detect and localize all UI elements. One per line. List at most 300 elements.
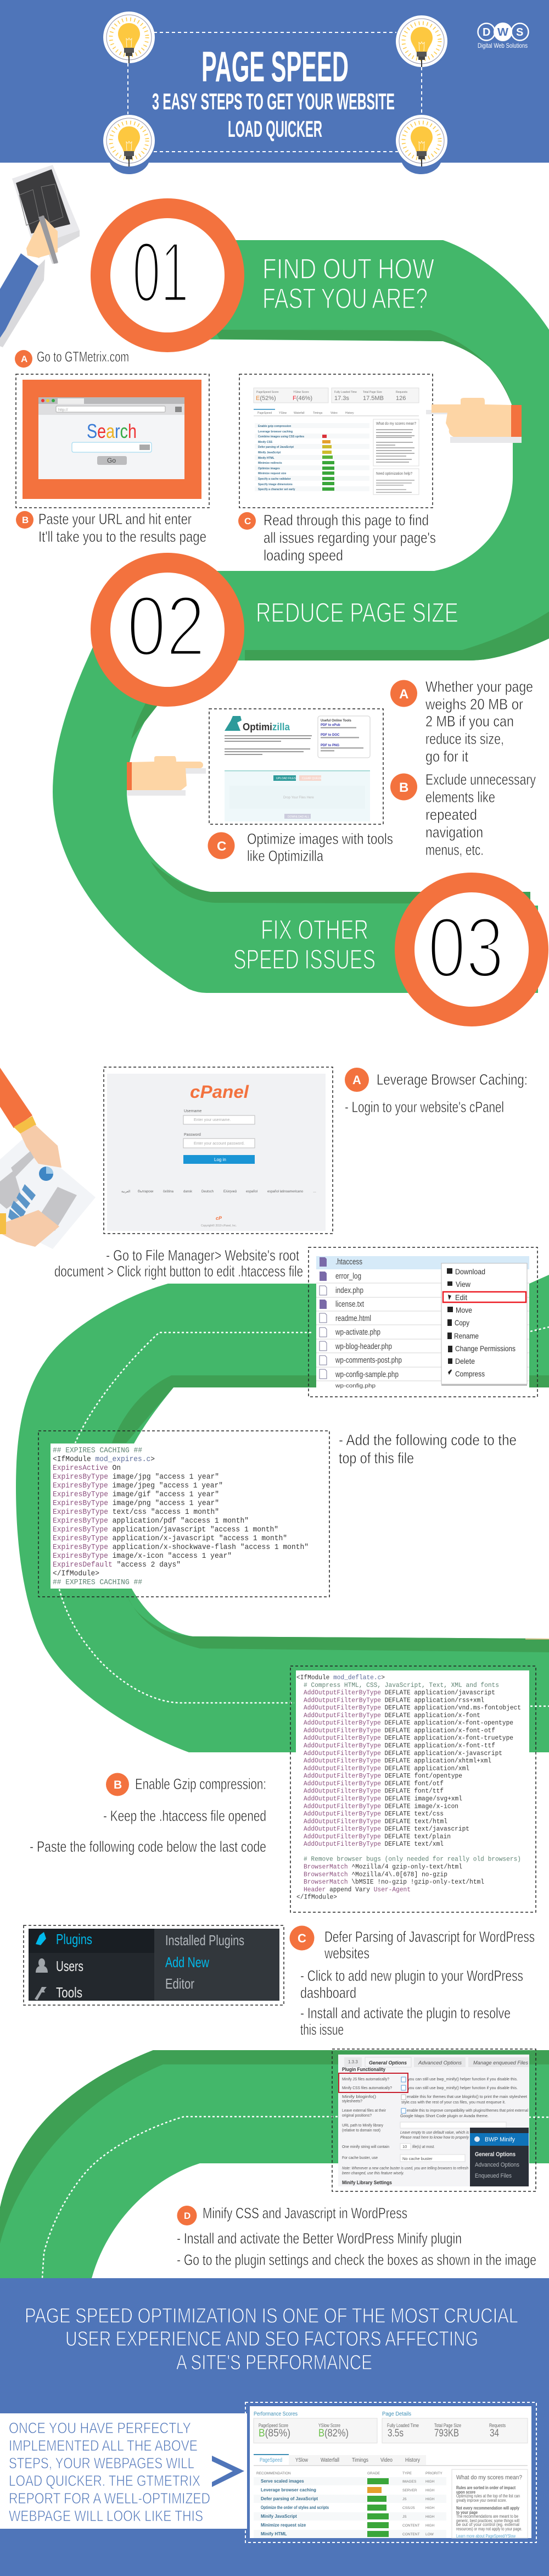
screenshot: cPanel login: español latinoamericano (267, 1190, 304, 1193)
screenshot: cPanel login: Deutsch (201, 1190, 214, 1193)
callout: result text: IMPLEMENTED ALL THE ABOVE (9, 2437, 198, 2454)
code block: mod_deflate: # Compress HTML, CSS, JavaScript, Text, XML and fonts (304, 1681, 499, 1689)
code block: expires caching: ExpiresByType image/x-icon "access 1 year" (53, 1552, 232, 1561)
screenshot: optimized GTmetrix report: Minimize request size (261, 2523, 306, 2528)
step 3 item C: dashboard (300, 1984, 356, 2001)
code block: expires caching: ExpiresByType image/jpeg "access 1 year" (53, 1481, 223, 1490)
file manager instruction (54, 1247, 303, 1280)
code block: mod_deflate: BrowserMatch ^Mozilla/4 gzip-only-text/html (304, 1863, 462, 1870)
step 1 item B (16, 510, 206, 545)
code block: expires caching: ExpiresByType image/gif "access 1 year" (53, 1490, 219, 1499)
screenshot: GTmetrix report: YSlow Score (293, 391, 309, 394)
screenshot: optimized GTmetrix report: to your page (456, 2510, 478, 2515)
screenshot: BWP Minify settings: Advanced Options (475, 2162, 519, 2168)
screenshot: file manager: Download (455, 1267, 485, 1276)
code block: mod_deflate: AddOutputFilterByType DEFLATE application/xhtml+xml (304, 1757, 491, 1765)
screenshot: BWP Minify settings: Minify bloginfo() (342, 2094, 377, 2099)
screenshot: optimized GTmetrix report: HIGH (425, 2497, 435, 2501)
step 1 item C: all issues regarding your page's (264, 529, 436, 546)
screenshot: file manager: Compress (455, 1369, 485, 1378)
icon: light bulb top right (396, 15, 447, 67)
code block: mod_deflate: AddOutputFilterByType DEFLATE image/svg+xml (304, 1795, 462, 1802)
screenshot: BWP Minify settings: Enqueued Files (475, 2173, 512, 2179)
band shadow lower (126, 1594, 549, 1652)
step 2 item B: navigation (425, 824, 483, 841)
screenshot: file manager: license.txt (335, 1300, 365, 1309)
step 2 item A (390, 678, 533, 765)
screenshot: optimized GTmetrix report: B(82%) (318, 2428, 349, 2439)
step 2 item A: reduce its size, (425, 730, 504, 747)
screenshot: GTmetrix report: Timings (313, 412, 323, 415)
dashed title frame (128, 32, 422, 152)
screenshot: optimized GTmetrix report: resources) or may not apply to your page. (456, 2527, 522, 2531)
step 1 heading: FIND OUT HOW (262, 253, 434, 285)
step 3 item B: - Paste the following code below the last code (30, 1838, 266, 1855)
code block: mod_deflate: AddOutputFilterByType DEFLATE text/javascript (304, 1825, 469, 1833)
DWS logo: W (497, 26, 508, 38)
green band: step 1 (165, 240, 549, 660)
screenshot: BWP Minify settings: For cache buster, use (342, 2155, 378, 2160)
screenshot: BWP Minify settings (332, 2049, 536, 2191)
step 2 item A: A (399, 687, 408, 702)
screenshot: BWP Minify settings: Manage enqueued Files (473, 2060, 528, 2066)
screenshot: BWP Minify settings: Minify Library Settings (342, 2180, 392, 2186)
screenshot: cPanel login: čeština (163, 1190, 174, 1193)
instruction: add code: - Add the following code to the (339, 1431, 517, 1448)
step 2 item C: Optimize images with tools (247, 830, 393, 847)
screenshot: BWP Minify settings: original positions? (342, 2113, 372, 2118)
screenshot: optimized GTmetrix report: be out of your control (eg. external (456, 2522, 519, 2527)
code block: mod_deflate: AddOutputFilterByType DEFLATE application/rss+xml (304, 1696, 484, 1704)
code block: mod_deflate: AddOutputFilterByType DEFLATE font/opentype (304, 1772, 462, 1780)
screenshot: WordPress plugins menu: Users (56, 1958, 83, 1974)
screenshot: BWP Minify settings: enable this to improve compatibility with plugins/themes that print external (407, 2108, 528, 2113)
screenshot: optimized GTmetrix report: upon score (456, 2490, 475, 2495)
screenshot: WordPress plugins menu: Add New (165, 1954, 209, 1970)
screenshot: cPanel login: Ελληνικά (223, 1190, 237, 1193)
code block: mod_deflate: AddOutputFilterByType DEFLATE font/ttf (304, 1787, 444, 1795)
screenshot: BWP Minify settings: No cache buster (402, 2156, 433, 2161)
screenshot: cPanel login: български (138, 1190, 153, 1193)
code block: mod_deflate: AddOutputFilterByType DEFLATE text/xml (304, 1840, 444, 1848)
screenshot: optimized GTmetrix report: GRADE (367, 2472, 380, 2475)
dashed path upper (59, 1327, 549, 1706)
screenshot: optimized GTmetrix report: CSS/JS (402, 2506, 415, 2510)
screenshot: Optimizilla: PDF to PNG (321, 744, 339, 747)
screenshot: optimized GTmetrix report: HIGH (425, 2515, 435, 2519)
screenshot: GTmetrix report: What do my scores mean? (376, 422, 416, 426)
screenshot: BWP Minify settings: One minify string will contain (342, 2144, 389, 2149)
screenshot: optimized GTmetrix report: CONTENT (402, 2533, 419, 2536)
screenshot: BWP Minify settings: General Options (369, 2060, 407, 2066)
screenshot: optimized GTmetrix report: B(85%) (259, 2428, 290, 2439)
code block: expires caching: ExpiresByType image/jpg "access 1 year" (53, 1473, 219, 1481)
step 1 item A: Go to GTMetrix.com (37, 348, 129, 365)
screenshot: GTmetrix report: F(46%) (293, 395, 312, 402)
screenshot: optimized GTmetrix report: Rules are sorted in order of impact (456, 2485, 516, 2490)
screenshot: file manager: wp-config-sample.php (335, 1370, 399, 1379)
screenshot: file manager (309, 1247, 537, 1397)
screenshot: optimized GTmetrix report: JS (402, 2497, 407, 2501)
screenshot: file manager: wp-config.php (335, 1383, 376, 1389)
screenshot: GTmetrix report: Fully Loaded Time (334, 391, 357, 394)
file manager instruction: document > Click right button to edit .htaccess file (54, 1263, 303, 1280)
screenshot: optimized GTmetrix report: HIGH (425, 2480, 435, 2484)
band shadow lower (245, 612, 549, 660)
screenshot: optimized GTmetrix report: SERVER (402, 2489, 417, 2492)
screenshot: BWP Minify settings: enable this for themes that use bloginfo() to print the main stylesheet (407, 2094, 528, 2099)
screenshot: optimized GTmetrix report: HIGH (425, 2506, 435, 2510)
step 2 item A: go for it (425, 748, 468, 765)
screenshot: file manager: .htaccess (335, 1257, 362, 1267)
screenshot: optimized GTmetrix report: 34 (490, 2428, 499, 2439)
screenshot: BWP Minify settings: file(s) at most. (412, 2144, 435, 2149)
screenshot: GTmetrix report: PageSpeed Score (256, 391, 279, 394)
screenshot: WordPress plugins menu: Editor (165, 1975, 194, 1992)
code block: expires caching: ExpiresByType application/x-shockwave-flash "access 1 month" (53, 1543, 309, 1552)
screenshot: optimized GTmetrix report: Requests (489, 2423, 506, 2428)
screenshot: BWP Minify settings: Note: Whenever a new cache buster is used, you are telling browsers to refresh (342, 2166, 468, 2170)
screenshot: optimized GTmetrix report: YSlow Score (318, 2423, 340, 2428)
step 2 item B: repeated (425, 806, 477, 823)
screenshot: BWP Minify settings: you can still use bwp_minify() helper function if you disable this. (408, 2077, 518, 2081)
callout: result text: WEBPAGE WILL LOOK LIKE THIS (9, 2507, 203, 2524)
green band: section 3 middle (16, 1275, 549, 1752)
screenshot: file manager: Copy (455, 1318, 469, 1327)
step 1 item C: loading speed (264, 547, 343, 564)
screenshot: BWP Minify settings: Minify CSS files automatically? (342, 2085, 392, 2090)
icon: light bulb bottom left (103, 115, 155, 166)
screenshot: WordPress plugins menu (24, 1925, 284, 2005)
screenshot: optimized GTmetrix report: Waterfall (321, 2457, 339, 2463)
screenshot: file manager: error_log (335, 1272, 361, 1281)
callout: result text (0, 2413, 247, 2529)
code block: mod_deflate (290, 1666, 536, 1912)
screenshot: GTmetrix report: Need optimization help? (376, 472, 412, 476)
illustration: hand with tablet (0, 165, 80, 347)
step 3 heading: FIX OTHER (261, 914, 368, 945)
screenshot: cPanel login: Log in (214, 1157, 226, 1162)
screenshot: BWP Minify settings: Google Maps Short Code plugin or Avada theme. (400, 2113, 489, 2118)
screenshot: file manager: wp-blog-header.php (335, 1342, 392, 1351)
screenshot: file manager: readme.html (335, 1314, 371, 1323)
step 3 item D: Minify CSS and Javascript in WordPress (203, 2205, 407, 2222)
screenshot: optimized GTmetrix report: Total Page Size (434, 2423, 461, 2428)
icon: light bulb top left (103, 12, 155, 63)
step 1 number circle (100, 208, 234, 342)
screenshot: optimized GTmetrix report: 3.5s (388, 2428, 404, 2439)
screenshot: GTmetrix report: Minimize request size (258, 472, 287, 475)
code block: mod_deflate: AddOutputFilterByType DEFLATE application/x-font-opentype (304, 1719, 513, 1727)
screenshot: GTmetrix report: Video (330, 412, 338, 415)
step 2 item C (208, 830, 393, 864)
screenshot: file manager: Edit (455, 1293, 467, 1302)
screenshot: BWP Minify settings: Leave external files at their (342, 2108, 386, 2113)
step 3 heading (233, 914, 376, 975)
band shadow (0, 2050, 549, 2244)
step 3 item B: - Keep the .htaccess file opened (103, 1807, 266, 1824)
code block: expires caching: ExpiresDefault "access 2 days" (53, 1561, 181, 1569)
step 3 item A: A (352, 1073, 361, 1087)
screenshot: GTmetrix report: E(52%) (256, 395, 276, 402)
code block: mod_deflate: AddOutputFilterByType DEFLATE application/x-font-ttf (304, 1742, 495, 1750)
callout: result text: STEPS, YOUR WEBPAGES WILL (9, 2455, 194, 2472)
code block: mod_deflate: AddOutputFilterByType DEFLATE application/vnd.ms-fontobject (304, 1704, 521, 1712)
screenshot: optimized GTmetrix report: History (405, 2457, 420, 2463)
step 3 number circle (405, 882, 539, 1017)
code block: mod_deflate: AddOutputFilterByType DEFLATE image/x-icon (304, 1802, 458, 1810)
screenshot: file manager: wp-activate.php (335, 1328, 380, 1337)
screenshot: GTmetrix report: Minimize redirects (258, 462, 282, 465)
footer headline: A SITE'S PERFORMANCE (176, 2351, 372, 2374)
callout: result text: REPORT FOR A WELL-OPTIMIZED (9, 2490, 210, 2507)
screenshot: browser search: http:// (58, 408, 68, 412)
callout: result text: ONCE YOU HAVE PERFECTLY (9, 2419, 191, 2436)
step 1 item C (238, 512, 436, 564)
screenshot: optimized GTmetrix report: YSlow (295, 2457, 309, 2463)
subtitle (152, 88, 395, 142)
screenshot: cPanel login: Enter your account password. (194, 1142, 245, 1146)
step 2 heading: REDUCE PAGE SIZE (256, 597, 458, 628)
step 1 item B: Paste your URL and hit enter (38, 510, 192, 528)
screenshot: GTmetrix report: PageSpeed (257, 412, 272, 415)
screenshot: WordPress plugins menu: Installed Plugins (165, 1932, 244, 1948)
screenshot: BWP Minify settings: Plugin Functionality (342, 2067, 386, 2073)
decorative tab under right bulb (402, 163, 441, 174)
screenshot: GTmetrix report: Specify a cache validator (258, 478, 291, 481)
screenshot: optimized GTmetrix report: Performance Scores (254, 2411, 298, 2417)
step 3 item C: websites (324, 1945, 369, 1962)
screenshot: GTmetrix report: Defer parsing of JavaScript (258, 446, 294, 449)
screenshot: BWP Minify settings: (relative to domain root) (342, 2128, 380, 2133)
screenshot: cPanel login: cP (216, 1215, 222, 1221)
code block: expires caching: </IfModule> (53, 1569, 99, 1578)
dashed path lower (42, 2117, 549, 2278)
band shadow bottom (150, 861, 530, 904)
code block: expires caching: ExpiresByType application/x-javascript "access 1 month" (53, 1534, 287, 1543)
screenshot: optimized GTmetrix report: LOW (425, 2533, 434, 2536)
screenshot: optimized GTmetrix report: PageSpeed Score (259, 2423, 288, 2428)
screenshot: GTmetrix report: Specify image dimensions (258, 483, 293, 486)
step 1 heading: FAST YOU ARE? (262, 283, 428, 315)
screenshot: GTmetrix report: Minify JavaScript (258, 451, 281, 454)
screenshot: optimized GTmetrix report: HIGH (425, 2524, 435, 2528)
screenshot: BWP Minify settings: been changed, use this feature wisely. (342, 2170, 404, 2175)
screenshot: GTmetrix report: Minify CSS (258, 441, 273, 444)
screenshot: GTmetrix report: 17.3s (334, 395, 349, 402)
code block: mod_deflate: AddOutputFilterByType DEFLATE application/x-font-otf (304, 1726, 495, 1734)
code block: expires caching: ExpiresByType application/pdf "access 1 month" (53, 1517, 249, 1525)
screenshot: browser search (16, 374, 209, 508)
screenshot: optimized GTmetrix report: Not every recommendation will apply (456, 2506, 519, 2511)
code block: expires caching (38, 1431, 329, 1597)
icon: pointing hand left (426, 398, 522, 443)
subtitle: LOAD QUICKER (228, 116, 322, 142)
screenshot: optimized GTmetrix report: Minify JavaScript (261, 2514, 297, 2519)
screenshot: optimized GTmetrix report: Page Details (382, 2411, 411, 2417)
screenshot: optimized GTmetrix report: The recommendations are meant to be (456, 2514, 518, 2519)
band shadow top (214, 330, 513, 408)
decorative tab under left bulb (110, 163, 149, 174)
screenshot: optimized GTmetrix report: greatly improve your overall score. (456, 2498, 507, 2503)
screenshot: BWP Minify settings: BWP Minify (485, 2136, 515, 2143)
step 3 item A (345, 1068, 528, 1115)
step 2 item B: elements like (425, 789, 495, 806)
screenshot: optimized GTmetrix report: PRIORITY (425, 2472, 442, 2475)
screenshot: optimized GTmetrix report: Timings (352, 2457, 368, 2463)
arrow: chevron to report (212, 2456, 244, 2487)
code block: mod_deflate: BrowserMatch \bMSIE !no-gzip !gzip-only-text/html (304, 1878, 484, 1886)
screenshot: Optimizilla: PDF to DOC (321, 734, 340, 737)
screenshot: GTmetrix report: 126 (396, 395, 406, 402)
step 2 number circle (100, 563, 234, 697)
screenshot: optimized GTmetrix report: Optimizing rules at the top of the list can (456, 2494, 520, 2499)
screenshot: BWP Minify settings: you can still use bwp_minify() helper function if you disable this. (408, 2085, 518, 2090)
icon: light bulb bottom right (396, 115, 447, 166)
screenshot: optimized GTmetrix report: generic, best practices; some things will (456, 2518, 519, 2523)
screenshot: file manager: Change Permissions (455, 1344, 516, 1353)
code block: mod_deflate: AddOutputFilterByType DEFLATE application/x-javascript (304, 1750, 502, 1757)
step 2 item B: B (399, 780, 408, 795)
screenshot: Optimizilla: Useful Online Tools (321, 719, 352, 723)
screenshot: Optimizilla (209, 709, 383, 824)
screenshot: BWP Minify settings: stylesheets? (342, 2098, 362, 2103)
screenshot: file manager: wp-comments-post.php (335, 1356, 402, 1365)
screenshot: GTmetrix report: 17.5MB (363, 395, 384, 402)
code block: mod_deflate: AddOutputFilterByType DEFLATE application/x-font-truetype (304, 1734, 513, 1742)
step 2 item B: menus, etc. (425, 841, 484, 858)
screenshot: optimized GTmetrix report: Minify HTML (261, 2531, 287, 2536)
step 3 item B (30, 1773, 266, 1855)
screenshot: BWP Minify settings: 10 (402, 2144, 407, 2149)
screenshot: BWP Minify settings: Please read here to know how to properly (400, 2135, 469, 2140)
screenshot: optimized GTmetrix report: Leverage browser caching (261, 2488, 316, 2492)
screenshot: optimized GTmetrix report: Defer parsing of JavaScript (261, 2496, 318, 2501)
screenshot: BWP Minify settings: 1.3.3 (348, 2059, 358, 2064)
step 3 item B: B (114, 1779, 122, 1791)
screenshot: GTmetrix report: Requests (396, 391, 408, 394)
screenshot: cPanel login (104, 1067, 333, 1234)
screenshot: cPanel login: Enter your username. (194, 1118, 231, 1122)
step 1 heading (262, 253, 434, 315)
screenshot: optimized GTmetrix report: IMAGES (402, 2480, 417, 2484)
step 3 item C: C (298, 1931, 306, 1945)
step 1 item B: It'll take you to the results page (38, 528, 206, 545)
screenshot: BWP Minify settings: General Options (475, 2151, 516, 2158)
screenshot: file manager: Move (456, 1306, 472, 1314)
screenshot: optimized GTmetrix report: JS (402, 2515, 407, 2519)
screenshot: optimized GTmetrix report: Optimize the order of styles and scripts (261, 2505, 329, 2510)
screenshot: file manager: Delete (455, 1357, 475, 1365)
screenshot: optimized GTmetrix report: Serve scaled images (261, 2479, 304, 2484)
step 2 item B (390, 771, 536, 858)
instruction: add code: top of this file (339, 1450, 414, 1467)
screenshot: Optimizilla: Drop Your Files Here (283, 796, 314, 800)
screenshot: GTmetrix report: Enable gzip compression (258, 425, 291, 428)
step 3 heading: SPEED ISSUES (233, 944, 376, 975)
step 1 item A: A (21, 354, 27, 364)
code block: expires caching: ## EXPIRES CACHING ## (53, 1578, 142, 1587)
screenshot: cPanel login: español (246, 1190, 257, 1193)
screenshot: GTmetrix report: Minify HTML (258, 457, 274, 460)
code block: mod_deflate: # Remove browser bugs (only needed for really old browsers) (304, 1856, 521, 1863)
code block: mod_deflate: Header append Vary User-Agent (304, 1886, 411, 1894)
step 3 item C: this issue (300, 2021, 344, 2038)
illustration: hands holding report (0, 1068, 96, 1249)
screenshot: optimized GTmetrix report: Fully Loaded Time (387, 2423, 419, 2428)
DWS logo: D (483, 26, 490, 38)
screenshot: browser search: Search (87, 420, 137, 442)
green band: minify section (0, 2050, 549, 2278)
step 1 item C: C (244, 516, 251, 526)
step 3 item D (177, 2205, 536, 2268)
step 3 item B: Enable Gzip compression: (135, 1775, 266, 1792)
screenshot: Optimizilla: UPLOAD FILES (276, 777, 296, 780)
screenshot: GTmetrix report: YSlow (279, 412, 287, 415)
footer background (0, 2278, 549, 2576)
step 1 item A (15, 348, 129, 368)
screenshot: Optimizilla: Optimizilla (243, 721, 290, 732)
screenshot: cPanel login: Username (184, 1109, 201, 1113)
band shadow upper (112, 1375, 549, 1443)
screenshot: GTmetrix report: Combine images using CSS sprites (258, 435, 304, 438)
step 3 item D: - Install and activate the Better WordPress Minify plugin (177, 2230, 462, 2247)
code block: mod_deflate: AddOutputFilterByType DEFLATE application/xml (304, 1764, 469, 1772)
file manager instruction: - Go to File Manager> Website's root (106, 1247, 299, 1264)
screenshot: BWP Minify settings: Advanced Options (418, 2060, 462, 2066)
screenshot: cPanel login: Password (184, 1133, 201, 1137)
footer headline (25, 2305, 518, 2374)
header background (0, 0, 549, 163)
screenshot: BWP Minify settings: URL path to Minify library (342, 2123, 383, 2128)
green band: left curve and step 3 (53, 632, 538, 993)
code block: mod_deflate: AddOutputFilterByType DEFLATE font/otf (304, 1780, 444, 1787)
screenshot: cPanel login: dansk (183, 1190, 193, 1193)
step 1 item B: B (22, 515, 29, 525)
code block: mod_deflate: </IfModule> (296, 1894, 337, 1901)
screenshot: GTmetrix report: History (345, 412, 354, 415)
screenshot: optimized GTmetrix report: TYPE (402, 2472, 412, 2475)
step 3 number circle: 03 (428, 900, 504, 996)
step 3 item C (290, 1925, 535, 2038)
screenshot: file manager: index.php (335, 1286, 363, 1295)
screenshot: optimized GTmetrix report: 793KB (434, 2428, 459, 2439)
screenshot: GTmetrix report (239, 374, 433, 508)
screenshot: file manager: View (456, 1280, 471, 1289)
screenshot: optimized GTmetrix report: CONTENT (402, 2524, 419, 2528)
screenshot: optimized GTmetrix report: PageSpeed (260, 2457, 282, 2463)
icon: pointing hand right (127, 756, 206, 796)
screenshot: optimized GTmetrix report: HIGH (425, 2489, 435, 2492)
screenshot: optimized GTmetrix report: RECOMMENDATION (256, 2472, 291, 2475)
screenshot: WordPress plugins menu: Plugins (56, 1931, 92, 1947)
screenshot: optimized GTmetrix report (245, 2402, 536, 2542)
title: PAGE SPEED (201, 42, 349, 91)
screenshot: optimized GTmetrix report: Video (380, 2457, 393, 2463)
screenshot: WordPress plugins menu: Tools (56, 1984, 82, 2001)
screenshot: GTmetrix report: Optimize images (258, 467, 280, 470)
code block: mod_deflate: <IfModule mod_deflate.c> (296, 1674, 385, 1681)
screenshot: GTmetrix report: Specify a character set early (258, 488, 295, 491)
step 2 item A: 2 MB if you can (425, 713, 514, 730)
code block: expires caching: ExpiresByType image/png "access 1 year" (53, 1499, 219, 1508)
code block: mod_deflate: AddOutputFilterByType DEFLATE text/css (304, 1810, 444, 1818)
screenshot: cPanel login: العربية (121, 1190, 131, 1193)
screenshot: browser search: Go (107, 457, 116, 464)
code block: mod_deflate: BrowserMatch ^Mozilla/4\.0[678] no-gzip (304, 1870, 447, 1878)
screenshot: BWP Minify settings: style.css with the rest of your css files, you must enqueue it. (401, 2100, 506, 2105)
DWS logo (478, 23, 528, 49)
